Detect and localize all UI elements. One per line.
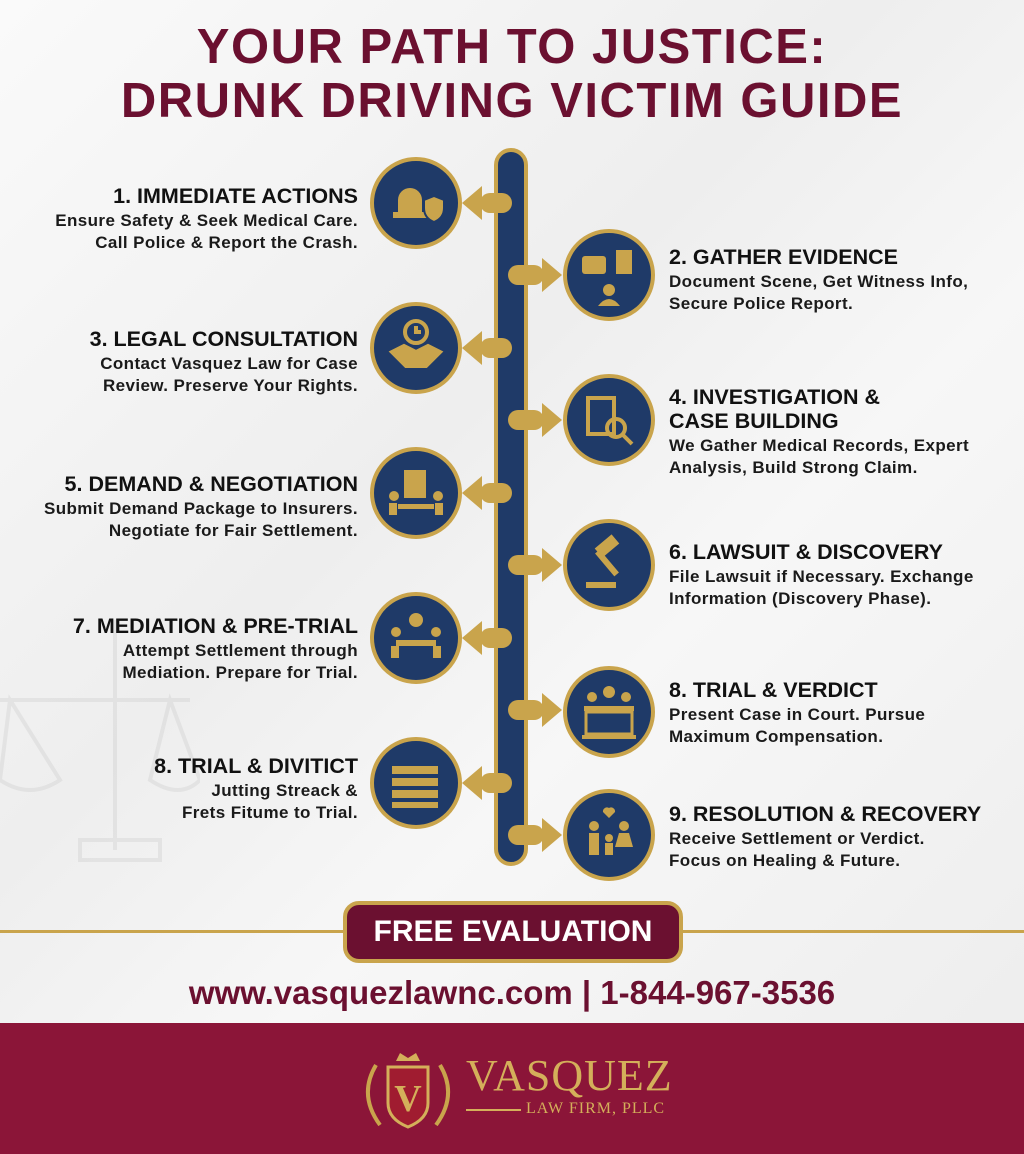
icon: money stack [372,739,460,827]
step 4: 4. INVESTIGATION & [669,385,880,409]
step 4: We Gather Medical Records, Expert [669,436,969,455]
step 7: Attempt Settlement through [123,641,358,660]
icon: gavel [565,521,653,609]
step 5: Negotiate for Fair Settlement. [109,521,358,540]
step 8 left: Jutting Streack & [211,781,358,800]
step 1: Ensure Safety & Seek Medical Care. [55,211,358,230]
step 4 [669,385,969,477]
logo: VASQUEZ [466,1051,673,1100]
step 3 [90,327,358,395]
step 5: 5. DEMAND & NEGOTIATION [65,472,358,496]
title: DRUNK DRIVING VICTIM GUIDE [121,74,903,128]
step 7: Mediation. Prepare for Trial. [122,663,358,682]
timeline [370,148,655,881]
CTA button: FREE EVALUATION [374,915,652,948]
step 8 left: 8. TRIAL & DIVITICT [154,754,358,778]
CTA button [343,901,683,963]
title [121,20,903,128]
step 4: Analysis, Build Strong Claim. [669,458,918,477]
step 1: Call Police & Report the Crash. [95,233,358,252]
title: YOUR PATH TO JUSTICE: [197,20,827,74]
step 3: Review. Preserve Your Rights. [103,376,358,395]
step 2: Document Scene, Get Witness Info, [669,272,968,291]
logo: LAW FIRM, PLLC [526,1100,665,1117]
step 6: File Lawsuit if Necessary. Exchange [669,567,974,586]
step 6: 6. LAWSUIT & DISCOVERY [669,540,943,564]
step 8 right [669,678,925,746]
step 5: Submit Demand Package to Insurers. [44,499,358,518]
step 5 [44,472,358,540]
step 8 right: Present Case in Court. Pursue [669,705,925,724]
step 2 [669,245,968,313]
step 3: 3. LEGAL CONSULTATION [90,327,358,351]
icon: alarm & shield [372,159,460,247]
step 9: 9. RESOLUTION & RECOVERY [669,802,981,826]
step 7: 7. MEDIATION & PRE-TRIAL [73,614,358,638]
step 4: CASE BUILDING [669,409,839,433]
step 2: 2. GATHER EVIDENCE [669,245,898,269]
step 8 right: Maximum Compensation. [669,727,883,746]
icon: document magnifier [565,376,653,464]
spine [496,150,526,864]
icon: family [565,791,653,879]
logo [366,1051,673,1129]
step 8 left [154,754,358,822]
arrows right [508,258,562,852]
icon: mediation table [372,594,460,682]
arrows left [462,186,512,800]
step 6 [669,540,974,608]
step 3: Contact Vasquez Law for Case [100,354,358,373]
icon: courtroom [565,668,653,756]
icon: camera & notes [565,231,653,319]
logo: V [394,1078,422,1120]
step 9: Focus on Healing & Future. [669,851,900,870]
step 1 [55,184,358,252]
step 7 [73,614,358,682]
icon: handshake & clock [372,304,460,392]
step 8 left: Frets Fitume to Trial. [182,803,358,822]
footer [0,1023,1024,1154]
divider line [0,930,1024,933]
step 8 right: 8. TRIAL & VERDICT [669,678,878,702]
icon: demand meeting [372,449,460,537]
background scales decoration [0,620,200,862]
step 6: Information (Discovery Phase). [669,589,931,608]
step 1: 1. IMMEDIATE ACTIONS [113,184,358,208]
step 9: Receive Settlement or Verdict. [669,829,925,848]
step 2: Secure Police Report. [669,294,853,313]
step 9 [669,802,981,870]
contact line: www.vasquezlawnc.com | 1-844-967-3536 [189,974,835,1011]
